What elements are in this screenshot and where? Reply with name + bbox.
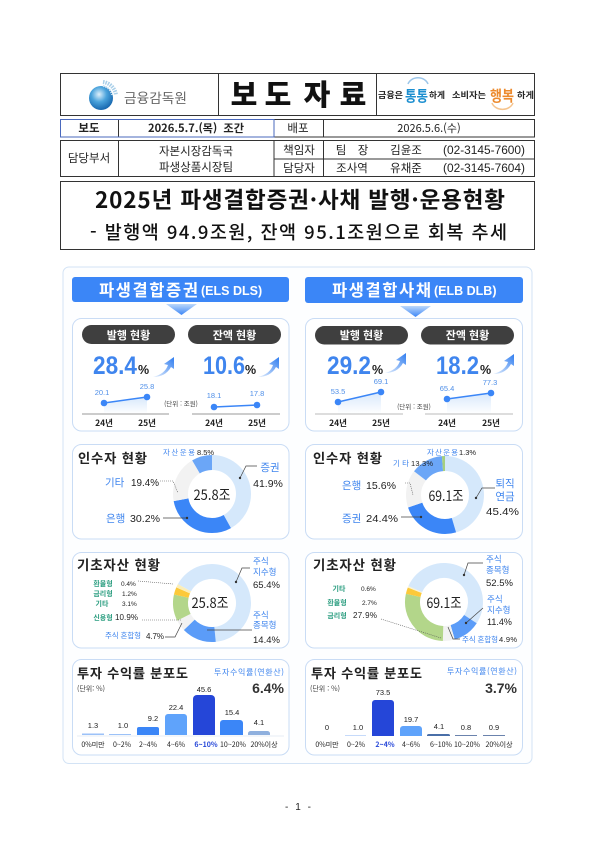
- donut labels: 1.2%: [122, 591, 137, 598]
- donut labels: 4.7%: [146, 632, 164, 641]
- line chart: balance: [192, 389, 280, 429]
- bar chart: [77, 685, 284, 750]
- donut labels: 환율형: [327, 598, 347, 608]
- line chart: balance: [425, 378, 513, 429]
- release date row: [60, 120, 534, 137]
- bar chart: 19.7: [404, 715, 418, 724]
- bar chart: 0.9: [489, 723, 499, 732]
- card: return distribution: [72, 660, 289, 755]
- banner: ELS DLS: (ELS DLS): [201, 284, 262, 298]
- donut labels: 종목형: [253, 619, 276, 631]
- label: balance: 잔액 현황: [446, 327, 489, 343]
- line chart: issuance: 25년: [138, 417, 156, 429]
- donut total: 25.8조: [192, 593, 229, 613]
- donut labels: 4.9%: [499, 635, 517, 644]
- bar chart: 73.5: [376, 688, 390, 697]
- release date row: 2026.5.6.(수): [397, 120, 461, 136]
- stat: issuance growth: [327, 352, 406, 380]
- stat: balance growth: %: [245, 363, 256, 377]
- donut total: 69.1조: [428, 486, 464, 506]
- donut labels: 자산운용: [163, 447, 195, 458]
- heading: 인수자 현황: [313, 448, 382, 467]
- contacts table: 담당부서: [68, 150, 110, 166]
- line chart: balance: 17.8: [250, 389, 264, 398]
- stat: balance growth: 10.6: [203, 352, 245, 380]
- donut labels: 10.9%: [115, 613, 138, 622]
- banner: ELB DLB: (ELB DLB): [434, 284, 496, 298]
- bar chart: 10~20%: [220, 740, 246, 750]
- bar chart: 2~4%: [375, 740, 395, 750]
- bar chart: 4~6%: [402, 740, 421, 750]
- press release heading: [231, 72, 366, 114]
- donut labels: 주식: [253, 609, 269, 621]
- donut labels: 주식 혼합형: [462, 634, 498, 645]
- heading: 투자 수익률 분포도: [77, 663, 188, 682]
- bar chart: 20%이상: [485, 740, 513, 750]
- donut labels: 지수형: [253, 566, 276, 578]
- bar chart: 10~20%: [454, 740, 480, 750]
- line chart: balance: 77.3: [483, 378, 497, 387]
- annualised return: [214, 667, 285, 696]
- panel: derivative-linked bonds: [305, 277, 523, 755]
- unit note: (단위 : 조원): [397, 401, 431, 411]
- bar chart: 0.8: [461, 723, 471, 732]
- title box: [60, 182, 534, 250]
- donut labels: 은행: [342, 478, 361, 493]
- unit note: (단위 : %): [310, 684, 340, 694]
- bar chart: [315, 688, 513, 750]
- donut labels: 주식 혼합형: [105, 630, 141, 641]
- card: underlying assets: [72, 552, 289, 648]
- line chart: balance: 25년: [482, 417, 500, 429]
- contacts table: (02-3145-7604): [443, 163, 525, 175]
- donut labels: [327, 553, 517, 645]
- contacts table: (02-3145-7600): [443, 145, 525, 157]
- label: balance: [188, 325, 281, 344]
- donut chart: [169, 560, 255, 646]
- bar chart: 0~2%: [347, 740, 366, 750]
- donut labels: 24.4%: [366, 513, 398, 525]
- donut labels: 금리형: [327, 611, 347, 621]
- donut labels: 은행: [106, 511, 125, 526]
- donut labels: [105, 447, 283, 526]
- donut labels: 19.4%: [131, 477, 159, 489]
- donut labels: 14.4%: [253, 635, 280, 646]
- stat: issuance growth: %: [372, 363, 383, 377]
- donut labels: 1.3%: [459, 448, 476, 457]
- bar chart: 4.1: [434, 722, 444, 731]
- label: issuance: 발행 현황: [340, 327, 383, 343]
- donut labels: 환율형: [93, 579, 113, 589]
- slogan: 하게: [517, 89, 534, 101]
- release date row: 보도: [78, 120, 100, 136]
- panel: derivative-linked securities: [72, 277, 289, 755]
- line chart: issuance: 20.1: [95, 388, 109, 397]
- press release heading: 보: [231, 72, 257, 114]
- slogan: [378, 78, 534, 109]
- contacts table: 책임자: [283, 142, 315, 158]
- donut labels: 52.5%: [486, 578, 513, 589]
- stat: issuance growth: [93, 352, 174, 380]
- annualised return: 투자수익률(연환산): [447, 666, 517, 677]
- line chart: issuance: 69.1: [374, 377, 388, 386]
- line chart: balance: 25년: [248, 417, 266, 429]
- line chart: balance: 24년: [205, 417, 223, 429]
- annualised return: 3.7%: [485, 680, 518, 696]
- donut labels: 8.5%: [197, 448, 214, 457]
- donut labels: 3.1%: [122, 601, 137, 608]
- release date row: 2026.5.7.(목) 조간: [148, 120, 244, 136]
- donut labels: 퇴직: [495, 476, 515, 491]
- line chart: balance: 65.4: [440, 384, 454, 393]
- page number: - 1 -: [285, 802, 311, 813]
- donut labels: 27.9%: [353, 611, 377, 620]
- donut labels: [93, 555, 280, 646]
- donut labels: 자산운용: [427, 447, 458, 458]
- label: issuance: [315, 326, 408, 344]
- bar chart: 0%미만: [315, 740, 339, 750]
- annualised return: 6.4%: [252, 680, 285, 696]
- donut labels: 2.7%: [362, 600, 377, 607]
- donut labels: 지수형: [487, 604, 510, 616]
- contacts table: 자본시장감독국: [159, 143, 233, 159]
- donut labels: 30.2%: [130, 513, 160, 525]
- bar chart: 20%이상: [250, 740, 278, 750]
- contacts table: 조사역: [336, 160, 368, 176]
- bar chart: 4.1: [254, 718, 264, 727]
- bar chart: 0%미만: [81, 740, 105, 750]
- stat: balance growth: %: [480, 363, 491, 377]
- line chart: issuance: 25.8: [140, 382, 154, 391]
- line chart: issuance: 24년: [95, 417, 113, 429]
- line chart: balance: 18.1: [207, 391, 221, 400]
- card: underlying assets: [306, 552, 522, 648]
- donut labels: 금리형: [93, 589, 113, 599]
- bar chart: 2~4%: [139, 740, 158, 750]
- contacts table: 담당자: [283, 160, 315, 176]
- heading: 인수자 현황: [78, 448, 147, 467]
- slogan: 소비자는: [452, 89, 486, 101]
- donut chart: [414, 464, 476, 526]
- annualised return: 투자수익률(연환산): [214, 667, 284, 678]
- card: issuance and balance: [306, 318, 522, 431]
- banner: ELB DLB: [305, 277, 523, 317]
- heading: 투자 수익률 분포도: [311, 663, 422, 682]
- bar chart: 4~6%: [167, 740, 186, 750]
- contacts table: 유채준: [390, 160, 422, 176]
- line chart: issuance: [315, 377, 403, 429]
- donut total: 69.1조: [426, 593, 462, 613]
- release date row: 배포: [287, 120, 309, 136]
- card: return distribution: [306, 660, 522, 755]
- donut chart: [180, 462, 244, 526]
- bar chart: 1.0: [353, 723, 363, 732]
- bar chart: 9.2: [148, 714, 158, 723]
- stat: issuance growth: 28.4: [93, 352, 137, 380]
- donut labels: [342, 447, 519, 526]
- contacts table: 장: [358, 142, 369, 158]
- donut total: 25.8조: [194, 485, 231, 505]
- stat: balance growth: 18.2: [436, 352, 479, 380]
- line chart: issuance: 24년: [329, 417, 347, 429]
- bar chart: 22.4: [169, 703, 183, 712]
- line chart: issuance: 25년: [372, 417, 390, 429]
- main title: 2025년 파생결합증권·사채 발행·운용현황: [95, 183, 505, 215]
- donut labels: 0.4%: [121, 581, 136, 588]
- label: issuance: [82, 325, 175, 344]
- contacts table: 김윤조: [390, 142, 422, 158]
- annualised return: [447, 666, 518, 696]
- slogan: 금융은: [378, 89, 403, 101]
- donut chart: [402, 560, 486, 644]
- unit note: (단위 : 조원): [164, 398, 198, 408]
- donut labels: 종목형: [486, 564, 509, 576]
- card: subscribers: [306, 444, 522, 539]
- donut labels: 0.6%: [361, 586, 376, 593]
- bar chart: 1.0: [118, 721, 128, 730]
- contacts table: [60, 140, 534, 176]
- donut labels: 증권: [342, 511, 361, 526]
- label: balance: [421, 326, 514, 344]
- slogan: 하게: [429, 89, 445, 101]
- heading: 기초자산 현황: [313, 554, 396, 574]
- stat: balance growth: [203, 352, 279, 380]
- donut labels: 기타: [96, 599, 109, 609]
- banner: ELS DLS: 파생결합증권: [99, 277, 198, 301]
- donut labels: 신용형: [93, 613, 113, 623]
- bar chart: 6~10%: [194, 740, 218, 750]
- donut labels: 증권: [260, 460, 280, 475]
- icon: FSS logo: [89, 82, 116, 110]
- banner: ELS DLS: [72, 277, 289, 315]
- press release heading: 자: [304, 72, 331, 114]
- bar chart: 6~10%: [430, 740, 453, 750]
- stat: issuance growth: %: [138, 363, 149, 377]
- donut labels: 기타: [333, 584, 346, 594]
- donut labels: 13.3%: [411, 459, 433, 468]
- bar chart: 45.6: [197, 685, 211, 694]
- subtitle: - 발행액 94.9조원, 잔액 95.1조원으로 회복 추세: [90, 219, 507, 245]
- donut labels: 연금: [495, 489, 515, 504]
- header banner: [60, 72, 534, 116]
- donut labels: 주식: [487, 593, 503, 605]
- line chart: balance: 24년: [438, 417, 456, 429]
- donut labels: 주식: [253, 555, 269, 567]
- donut labels: 15.6%: [366, 480, 396, 492]
- label: balance: 잔액 현황: [213, 327, 256, 343]
- slogan: 통통: [405, 85, 428, 106]
- infographic panel: [63, 267, 532, 764]
- donut labels: 기타: [105, 475, 125, 490]
- slogan: 행복: [490, 85, 514, 106]
- donut labels: 11.4%: [487, 617, 512, 627]
- line chart: issuance: [82, 382, 169, 429]
- press release heading: 료: [340, 72, 366, 114]
- label: issuance: 발행 현황: [107, 327, 150, 343]
- bar chart: 15.4: [225, 708, 239, 717]
- line chart: issuance: 53.5: [331, 387, 345, 396]
- donut labels: 65.4%: [253, 580, 280, 591]
- contacts table: 파생상품시장팀: [159, 159, 233, 175]
- donut labels: 주식: [486, 553, 502, 565]
- stat: balance growth: [436, 352, 514, 380]
- stat: issuance growth: 29.2: [327, 352, 371, 380]
- heading: 기초자산 현황: [77, 554, 160, 574]
- donut labels: 기타: [393, 458, 409, 469]
- card: subscribers: [72, 444, 289, 539]
- contacts table: 팀: [336, 142, 346, 158]
- donut labels: 41.9%: [253, 478, 283, 490]
- bar chart: 1.3: [88, 721, 98, 730]
- banner: ELB DLB: 파생결합사채: [332, 277, 431, 301]
- card: issuance and balance: [72, 318, 289, 431]
- bar chart: 0: [325, 723, 329, 732]
- unit note: (단위: %): [77, 684, 105, 694]
- organisation name: 금융감독원: [124, 87, 187, 107]
- bar chart: 0~2%: [113, 740, 132, 750]
- donut labels: 45.4%: [486, 506, 519, 518]
- press release heading: 도: [265, 72, 291, 114]
